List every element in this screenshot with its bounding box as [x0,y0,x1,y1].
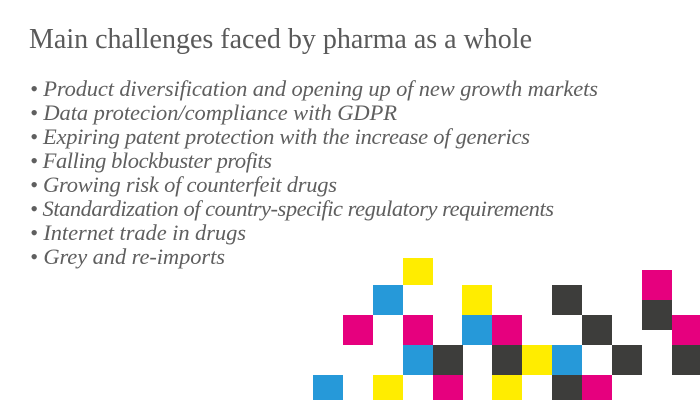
bullet list [30,76,598,269]
bullet: product diversification: • Product diversification and opening up of new growth markets [30,76,598,101]
title: Main challenges faced by pharma as a whole [29,24,532,55]
bullet: counterfeit drugs: • Growing risk of counterfeit drugs [30,172,337,197]
bullet: standardization: • Standardization of country-specific regulatory requirements [30,196,554,221]
bullet: internet trade: • Internet trade in drugs [30,220,246,245]
bullet: data protection: • Data protecion/compliance with GDPR [30,100,397,125]
pixel mosaic decoration [313,258,700,400]
bullet: blockbuster profits: • Falling blockbuster profits [30,148,272,173]
bullet: grey imports: • Grey and re-imports [30,244,225,269]
bullet: expiring patents: • Expiring patent protection with the increase of generics [30,124,530,149]
